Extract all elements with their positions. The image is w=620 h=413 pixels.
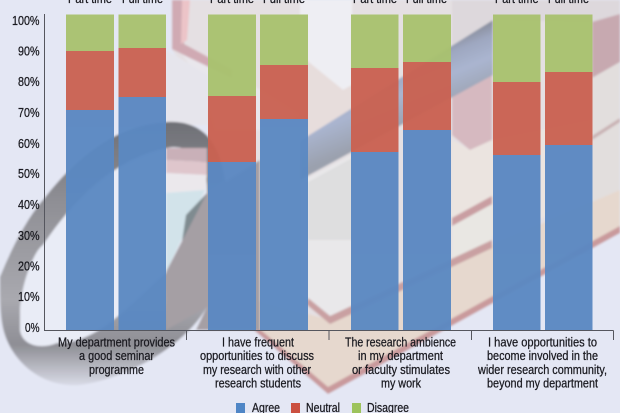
y axis labels: 40% <box>18 198 40 212</box>
y axis labels: 90% <box>18 44 40 58</box>
category label: seminar programme: My department provides <box>58 336 175 350</box>
bar: discuss part time <box>208 14 256 330</box>
y axis labels: 50% <box>18 167 40 181</box>
bar: discuss full time <box>260 14 308 330</box>
pale background on the left <box>0 0 172 290</box>
category label: seminar programme <box>58 336 175 377</box>
category label: research ambience: The research ambience <box>345 336 456 350</box>
category label: research ambience <box>345 336 456 390</box>
category label: seminar programme: programme <box>89 363 144 377</box>
bar: community full time <box>545 14 592 330</box>
y axis labels: 60% <box>18 137 40 151</box>
stacked bar chart <box>66 14 592 330</box>
column headers <box>68 0 589 6</box>
category label: seminar programme: a good seminar <box>79 349 154 363</box>
category label: discussing research: my research with other <box>203 363 311 377</box>
bar: ambience part time <box>351 14 398 330</box>
category label: wider community <box>477 336 607 390</box>
book stack <box>170 0 620 394</box>
y axis labels: 10% <box>18 290 40 304</box>
category label: research ambience: my work <box>381 376 422 390</box>
magnifying glass ring <box>0 122 230 385</box>
y axis labels: 20% <box>18 260 40 274</box>
category label: wider community: become involved in the <box>487 349 598 363</box>
y axis labels: 0% <box>25 321 40 335</box>
category label: discussing research: opportunities to discuss <box>200 349 314 363</box>
bar: seminar part time <box>66 14 114 330</box>
y axis labels: 80% <box>18 75 40 89</box>
category label: discussing research: research students <box>215 376 301 390</box>
lens interior <box>20 147 207 346</box>
category label: research ambience: in my department <box>358 349 443 363</box>
y axis labels: 70% <box>18 106 40 120</box>
y axis labels: 100% <box>12 14 40 28</box>
category label: research ambience: or faculty stimulates <box>352 363 450 377</box>
category label: discussing research: I have frequent <box>222 336 294 350</box>
category label: discussing research <box>200 336 314 390</box>
bar: community part time <box>493 14 540 330</box>
bar: ambience full time <box>403 14 451 330</box>
y axis labels: 30% <box>18 229 40 243</box>
book spine top-left <box>170 0 232 78</box>
category label: wider community: beyond my department <box>487 376 598 390</box>
y axis labels <box>12 14 40 335</box>
category label: wider community: I have opportunities to <box>488 336 597 350</box>
bar: seminar full time <box>118 14 166 330</box>
legend <box>236 401 409 413</box>
